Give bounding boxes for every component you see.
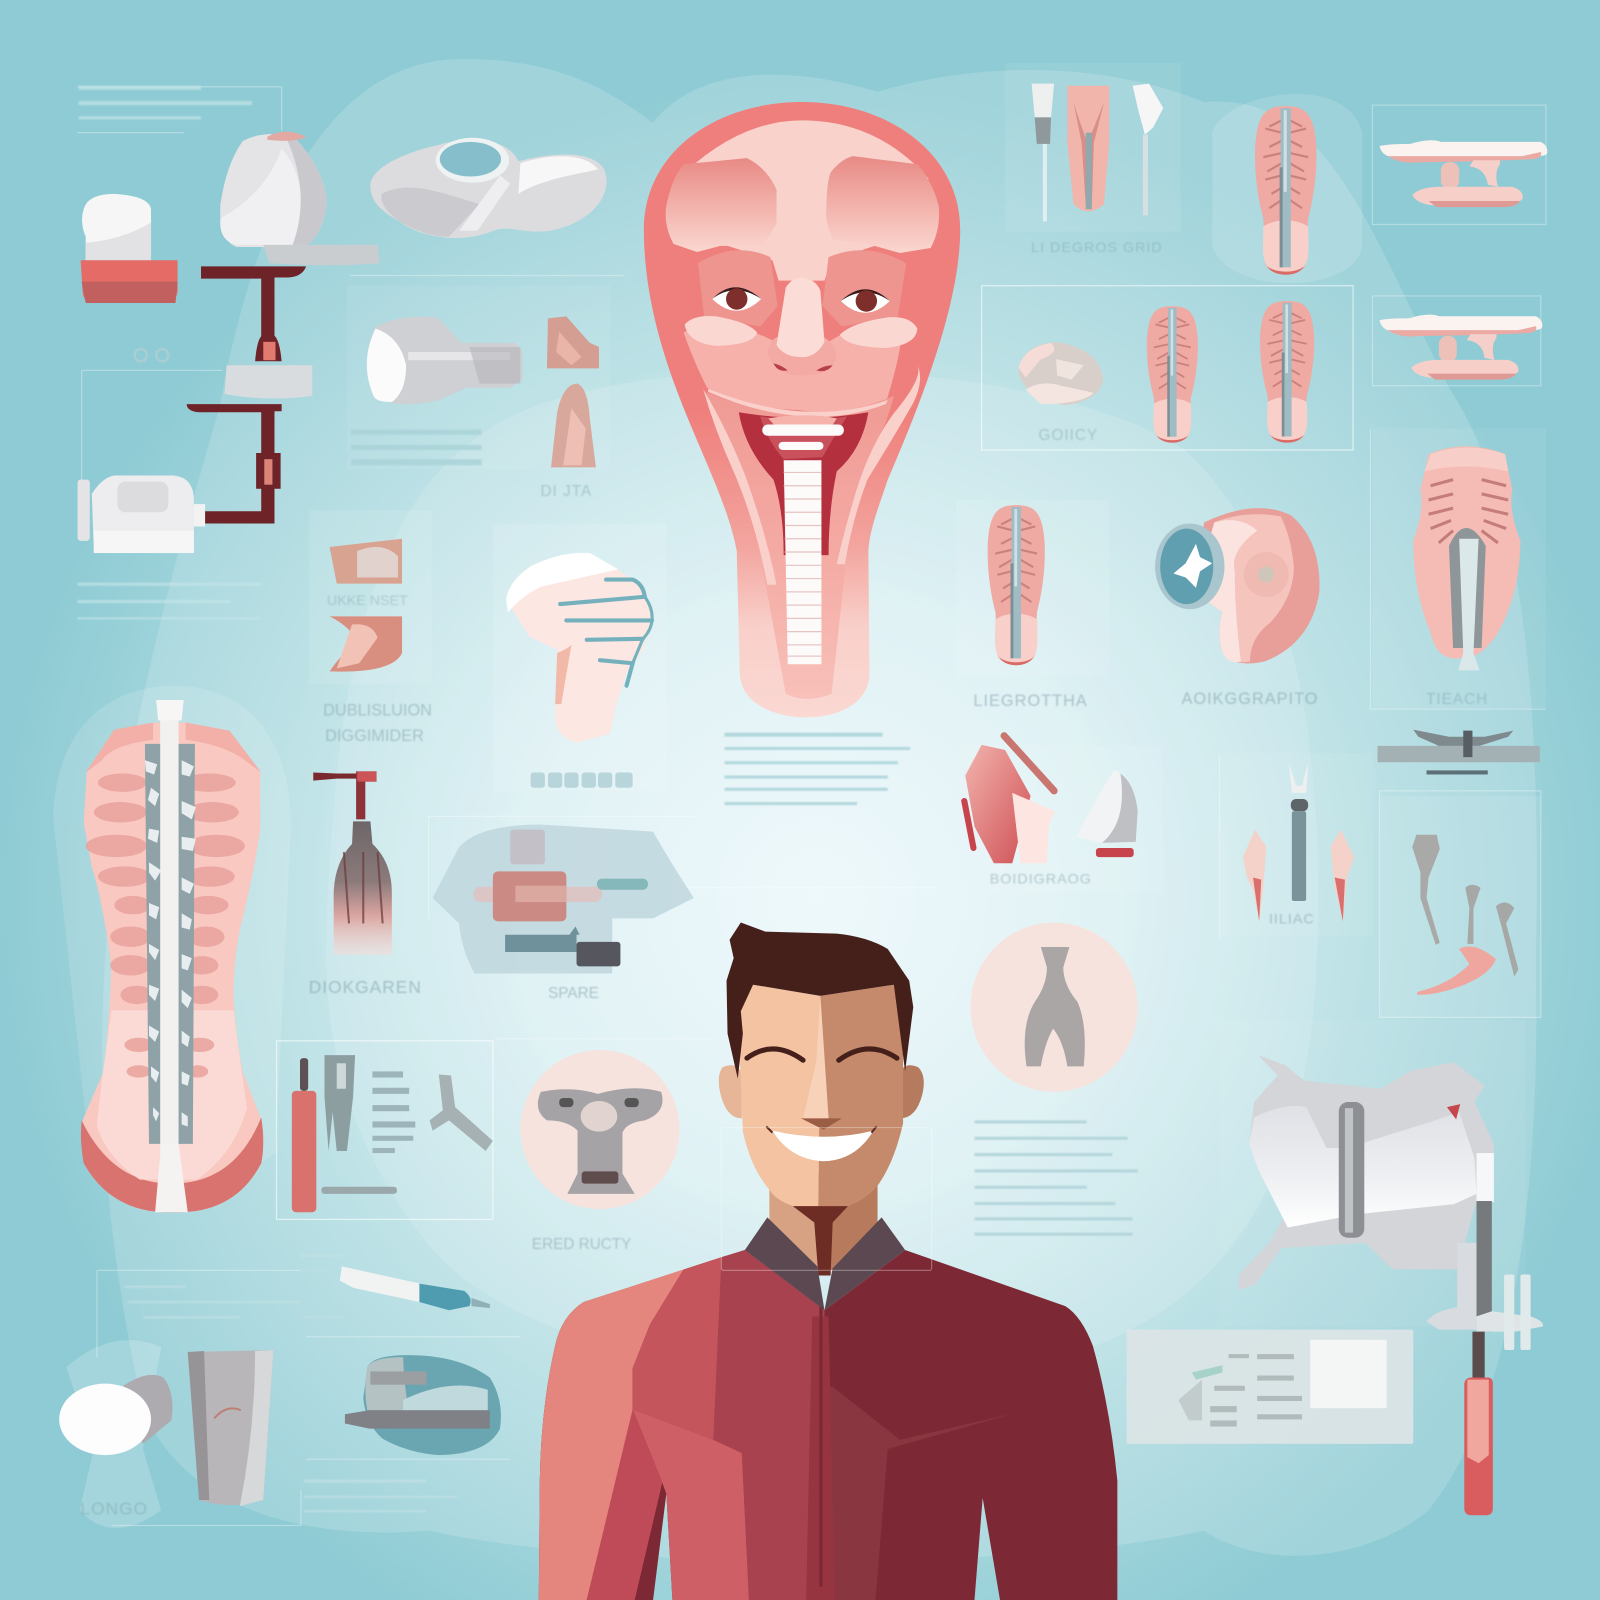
- label: central device: SPARE: [548, 985, 599, 1002]
- man: ears: [719, 1065, 924, 1118]
- face: left cheek highlight: [685, 316, 757, 346]
- icon: grey cup: [188, 1350, 273, 1506]
- text block: mid left lines: [351, 430, 482, 465]
- label: round joint: AOIKGGRAPITO: [1181, 690, 1319, 708]
- face: smile: [708, 389, 888, 417]
- label: hand and shell: BOIDIGRAOG: [990, 872, 1092, 888]
- icon: small tools group: [1412, 835, 1518, 995]
- label: small rings: [135, 349, 168, 361]
- label: dropper bottle: DIOKGAREN: [309, 977, 422, 997]
- icon: white machine: [78, 476, 205, 553]
- label: spine column middle: LIEGROTTHA: [973, 692, 1088, 710]
- icon: small forceps: [1243, 762, 1354, 921]
- panel: thin frame around neck: [721, 1128, 932, 1270]
- icon: pen tool: [340, 1266, 490, 1310]
- icon: white vase on plate: [220, 132, 380, 265]
- illustration: large spine: [81, 700, 263, 1212]
- icon: tools panel: [292, 1055, 493, 1212]
- man: hair: [727, 922, 913, 1079]
- label: bottom left: LONGO: [80, 1498, 148, 1518]
- label: circle T device: ERED RUCTY: [532, 1236, 631, 1253]
- face: nose: [767, 278, 837, 376]
- man: face: [740, 985, 903, 1208]
- icon: table lower: [1380, 315, 1542, 380]
- icon: teal device: [345, 1355, 501, 1455]
- label: pink tissue card heading: DIGGIMIDER: [325, 727, 424, 745]
- icon: top right bar: [1378, 730, 1540, 774]
- face: lower cheeks: [684, 324, 902, 413]
- icon: table top: [1380, 140, 1547, 207]
- face: right cheek highlight: [840, 317, 917, 348]
- face: lobes: [666, 156, 939, 253]
- icon: red pipe connectors: [187, 266, 306, 523]
- label: small forceps: IILIAC: [1269, 911, 1315, 927]
- icon: circle with grey T device: [520, 1050, 680, 1209]
- icon: kidney shaped device: [370, 138, 607, 238]
- icon: spine column: [1255, 106, 1316, 275]
- face: teeth: [762, 424, 844, 664]
- text block: lower right lines: [974, 1120, 1138, 1236]
- icon: round joint: [1155, 508, 1320, 663]
- icon: spine pair: [1147, 301, 1314, 443]
- icon: top instruments: [1032, 84, 1163, 221]
- face: eyes: [712, 287, 890, 313]
- face: mouth: [739, 412, 868, 555]
- panel: data card: [1127, 1330, 1413, 1444]
- face: brow shadows: [698, 250, 906, 327]
- icon: pink tissue cards: UKKE NSET: [327, 593, 408, 609]
- man: closed eyes: [747, 1049, 897, 1060]
- icon: small pink tissue samples: [547, 316, 599, 467]
- man: neck: [769, 1173, 878, 1270]
- icon: right pink body section: [1413, 446, 1520, 670]
- man: collar: [745, 1217, 905, 1310]
- label: pink tissue card heading: [323, 701, 432, 745]
- label: pink tissue card heading: DUBLISLUION: [323, 701, 432, 719]
- label: small section: DI JTA: [540, 483, 592, 500]
- icon: brain scan: [1018, 342, 1103, 405]
- icon: hand and shell: [964, 736, 1138, 863]
- icon: circle with wishbone: [970, 922, 1138, 1092]
- icon: row of tiles: [531, 772, 633, 788]
- icon: pink tissue cards: [327, 539, 408, 672]
- man: shirt: [539, 1250, 1117, 1600]
- label: top instruments: LI DEGROS GRID: [1031, 240, 1163, 256]
- icon: grey block: [224, 365, 312, 399]
- label: right pink body section: TIEACH: [1426, 691, 1488, 708]
- illustration: large grey bone: [1239, 1055, 1494, 1290]
- icon: white lump on red box: [81, 194, 178, 303]
- icon: central grey-teal device: [433, 824, 694, 973]
- icon: grey torch device: [367, 317, 522, 404]
- text block: under face: [724, 733, 910, 805]
- man: neck shadow: [793, 1206, 848, 1276]
- icon: white hand: [506, 553, 652, 743]
- illustration: smiling uterus face: [644, 102, 960, 717]
- icon: long red handled tool: [1427, 1201, 1543, 1515]
- label: brain scan: GOIICY: [1039, 427, 1098, 444]
- face: side streaks: [703, 365, 920, 585]
- icon: spine column middle: [988, 505, 1045, 665]
- panel: top left caption: [78, 86, 261, 619]
- text block: pen tool lines: [124, 1254, 457, 1512]
- face: lower cone: [706, 392, 894, 699]
- icon: white ball: [59, 1375, 172, 1455]
- illustration: smiling man: [539, 922, 1117, 1600]
- icon: dropper bottle: [313, 771, 392, 955]
- face: forehead: [673, 120, 929, 281]
- man: smile: [766, 1127, 877, 1161]
